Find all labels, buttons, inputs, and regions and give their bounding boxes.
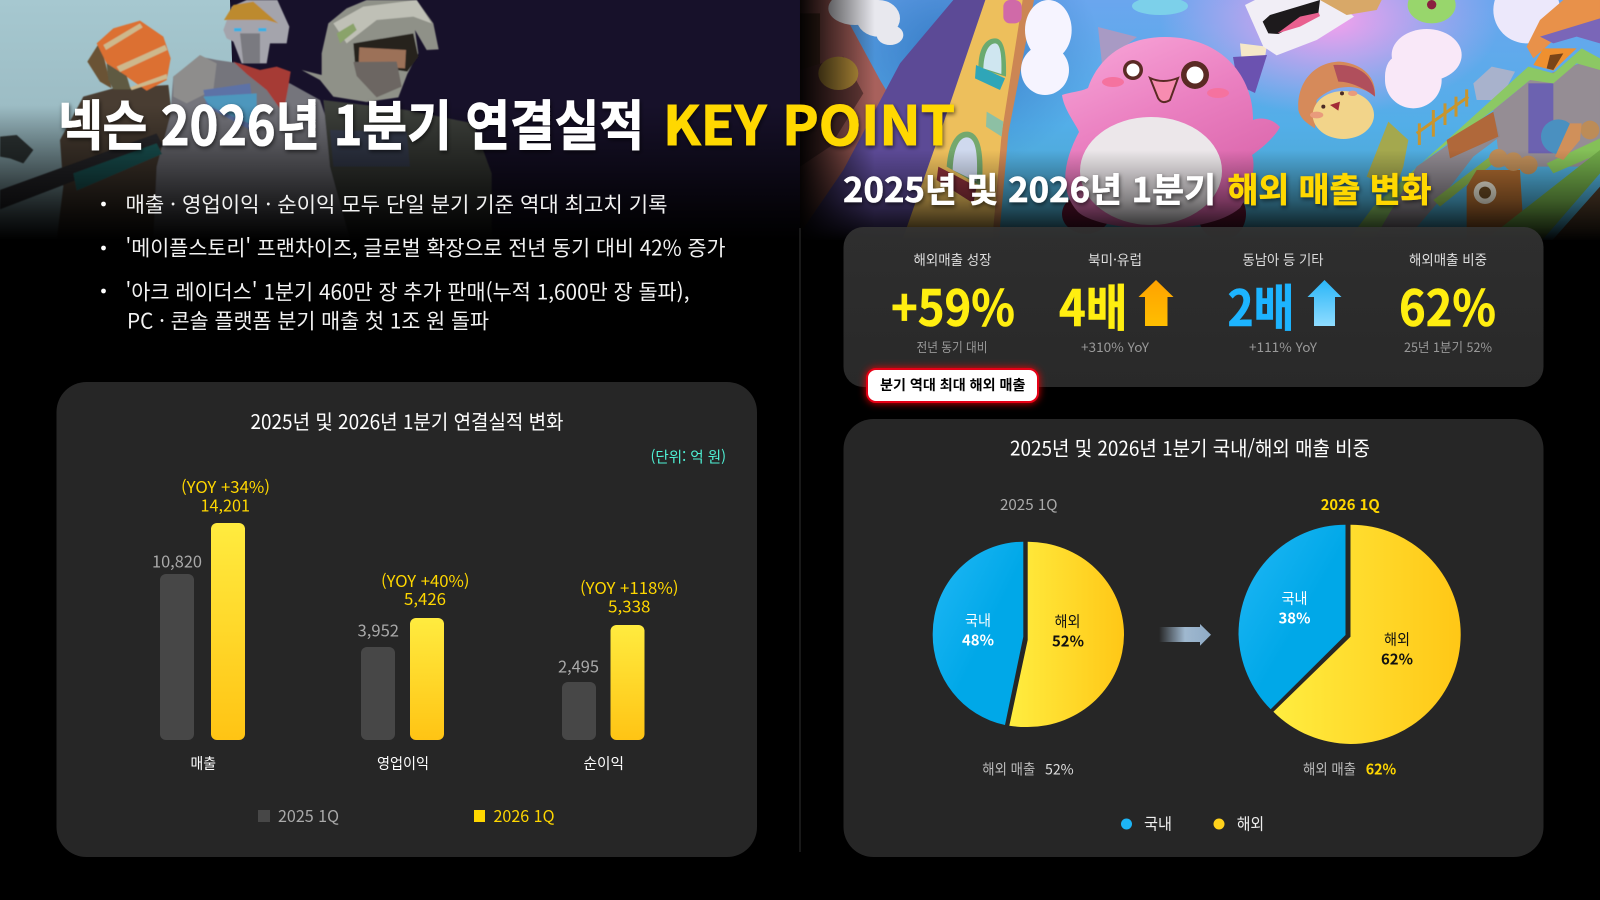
- scene: buildings and left cloud: [800, 0, 1072, 247]
- stat: overseas revenue share: 25년 1분기 52%: [1404, 337, 1492, 356]
- pie: 2026 1Q: [1238, 494, 1461, 780]
- pie: 2025 1Q: [933, 494, 1124, 780]
- bars: revenue: 매출: [190, 752, 216, 774]
- soldier one: [57, 85, 172, 240]
- pie: 2025 1Q: 48%: [962, 630, 994, 650]
- callout badge: 분기 역대 최대 해외 매출: [880, 375, 1026, 395]
- stat: North America / Europe: +310% YoY: [1081, 337, 1149, 356]
- bars: net income: [558, 575, 678, 774]
- header image fade overlays: [0, 0, 1600, 260]
- pie legend: 해외: [1237, 810, 1264, 834]
- stat: North America / Europe: 북미·유럽: [1088, 250, 1142, 270]
- rifle: [0, 133, 163, 209]
- arrow between pies: [1159, 624, 1211, 646]
- pie: 2026 1Q: 62%: [1381, 648, 1413, 670]
- main title: KEY POINT: [663, 82, 955, 161]
- bars: net income: 순이익: [584, 752, 624, 774]
- mushroom monster: [1298, 62, 1375, 128]
- stat: Southeast Asia and others: 2배: [1228, 269, 1294, 341]
- pie: 2025 1Q: 2025 1Q: [1000, 494, 1058, 515]
- pie: 2025 1Q: 국내: [965, 610, 991, 630]
- pie: 2026 1Q: 해외: [1384, 628, 1410, 650]
- stat: overseas revenue growth: [891, 250, 1015, 356]
- callout badge: [867, 369, 1038, 402]
- chart legend: 2026 1Q: [494, 803, 555, 827]
- stat: overseas revenue growth: +59%: [891, 269, 1015, 341]
- bars: operating profit: (YOY +40%): [381, 568, 470, 592]
- bullet 3: [101, 276, 690, 336]
- pie: 2026 1Q: 2026 1Q: [1321, 494, 1380, 515]
- bars: net income: 5,338: [608, 594, 651, 618]
- bars: operating profit: 영업이익: [377, 752, 429, 774]
- bars: operating profit: 3,952: [358, 618, 399, 642]
- icon: orange up arrow: [1138, 280, 1174, 326]
- pie: 2025 1Q: 52%: [1052, 630, 1084, 652]
- bars: net income: 2,495: [558, 654, 599, 678]
- chart legend: [258, 803, 555, 827]
- stat: North America / Europe: [1059, 250, 1174, 356]
- bars: revenue: 10,820: [152, 548, 202, 572]
- scene: pink blob character: [1062, 0, 1280, 240]
- stat: Southeast Asia and others: [1228, 250, 1342, 356]
- stat: overseas revenue growth: 전년 동기 대비: [916, 337, 988, 356]
- bars: net income: (YOY +118%): [580, 575, 678, 599]
- pie legend: [1121, 810, 1264, 834]
- terrain: [1473, 67, 1515, 100]
- pie: 2026 1Q: 국내: [1282, 588, 1308, 608]
- bars: revenue: (YOY +34%): [181, 474, 270, 498]
- soldier three: [323, 100, 492, 240]
- pie: 2026 1Q: 해외 매출: [1303, 758, 1356, 780]
- bullet 3: '아크 레이더스' 1분기 460만 장 추가 판매(누적 1,600만 장 돌파),: [126, 276, 690, 306]
- pie legend: 국내: [1144, 810, 1172, 834]
- bars: operating profit: [358, 568, 470, 774]
- stat: overseas revenue share: 62%: [1399, 269, 1496, 341]
- pie: 2025 1Q: 52%: [1045, 758, 1074, 780]
- stat: overseas revenue share: [1399, 250, 1496, 356]
- pie: 2025 1Q: 해외: [1054, 610, 1080, 632]
- panel: domestic vs overseas pie charts: [844, 419, 1544, 857]
- chart title: 2025년 및 2026년 1분기 국내/해외 매출 비중: [1010, 432, 1370, 462]
- bars: revenue: [152, 474, 270, 774]
- bars: operating profit: 5,426: [404, 586, 446, 610]
- cloud behind tower: [1021, 0, 1072, 95]
- bullet 2: '메이플스토리' 프랜차이즈, 글로벌 확장으로 전년 동기 대비 42% 증가: [126, 232, 726, 262]
- soldier two: [153, 57, 353, 240]
- scene: flying creatures and right clouds: [1240, 0, 1600, 247]
- stat: North America / Europe: 4배: [1059, 269, 1128, 341]
- right section heading: [843, 163, 1432, 212]
- pie: 2026 1Q: 62%: [1366, 758, 1396, 780]
- center divider: [800, 228, 801, 852]
- pie: 2025 1Q: 해외 매출: [982, 758, 1035, 780]
- game art: shooter characters (left header): [0, 0, 800, 247]
- stat: overseas revenue growth: 해외매출 성장: [914, 250, 992, 270]
- mushroom house: [1527, 0, 1600, 58]
- panel: overseas revenue stats: [844, 227, 1544, 387]
- unit label: (단위: 억 원): [650, 446, 726, 467]
- stat: Southeast Asia and others: +111% YoY: [1249, 337, 1317, 356]
- bullet 1: 매출 · 영업이익 · 순이익 모두 단일 분기 기준 역대 최고치 기록: [126, 189, 668, 219]
- game art: MapleStory scene (right header): [800, 0, 1600, 250]
- right section heading: 해외 매출 변화: [1228, 163, 1432, 212]
- panel: consolidated results bar chart: [56, 382, 757, 857]
- chart legend: 2025 1Q: [278, 803, 339, 827]
- aircraft silhouette: [0, 135, 33, 163]
- stat: overseas revenue share: 해외매출 비중: [1409, 250, 1487, 270]
- bars: revenue: 14,201: [200, 492, 250, 516]
- pie: 2026 1Q: 38%: [1278, 608, 1310, 628]
- icon: blue up arrow: [1308, 280, 1342, 326]
- chart title: 2025년 및 2026년 1분기 연결실적 변화: [250, 406, 564, 435]
- key point bullet list: [101, 189, 726, 336]
- bullet 3: PC · 콘솔 플랫폼 분기 매출 첫 1조 원 돌파: [127, 306, 489, 336]
- main title: 넥슨 2026년 1분기 연결실적: [58, 82, 644, 161]
- stat: Southeast Asia and others: 동남아 등 기타: [1242, 250, 1324, 270]
- right section heading: 2025년 및 2026년 1분기: [843, 163, 1216, 212]
